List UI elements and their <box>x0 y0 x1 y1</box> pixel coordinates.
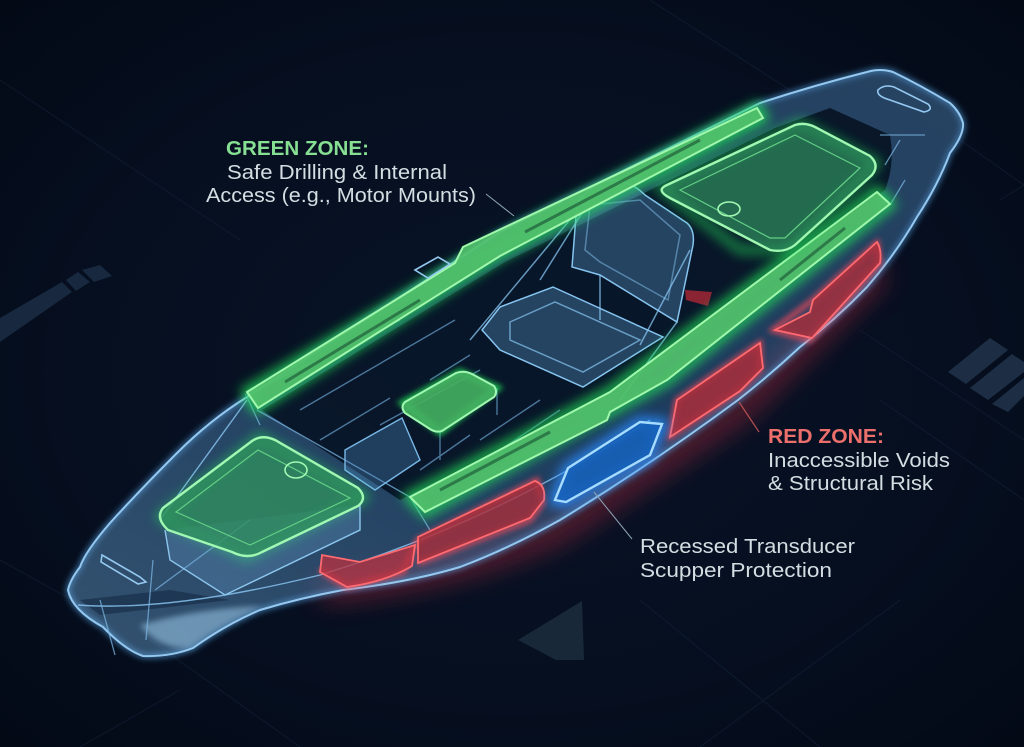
seat base <box>482 287 663 387</box>
callout: transducer <box>640 536 855 582</box>
hatch port ring <box>285 462 307 478</box>
red panel: bow small <box>320 545 415 587</box>
gunwale line <box>78 400 650 606</box>
callout: green zone: Safe Drilling & Internal <box>227 162 447 184</box>
carry handles <box>101 86 930 584</box>
green zone: top rail <box>247 108 763 408</box>
callout leader: green <box>486 194 514 216</box>
hull body <box>68 70 963 656</box>
seat <box>470 180 693 400</box>
dark bow interior <box>80 590 230 615</box>
callout leader: transducer <box>594 492 632 539</box>
hull highlight at bow <box>140 606 262 648</box>
green zone: bow hatch <box>160 437 365 595</box>
callout: green zone <box>206 138 476 207</box>
callout: transducer: Scupper Protection <box>640 560 832 582</box>
dark cockpit interior <box>262 108 892 500</box>
callout: red zone: RED ZONE: <box>768 426 884 448</box>
red panel: stern <box>775 242 881 338</box>
red panel: bow long <box>418 481 544 563</box>
green zone: centre box <box>402 372 497 432</box>
callout: red zone: & Structural Risk <box>768 473 934 495</box>
callout: transducer: Recessed Transducer <box>640 536 855 558</box>
decoration: bottom block <box>518 601 584 660</box>
callout leader: red <box>739 402 759 432</box>
decoration: right stripes <box>948 338 1024 412</box>
red interior patch <box>685 290 712 306</box>
green zone: bottom rail <box>410 192 890 512</box>
callout: red zone: Inaccessible Voids <box>768 450 950 472</box>
red panel: mid <box>670 343 763 437</box>
decoration: left stripes <box>0 265 112 342</box>
red zone panels <box>320 242 881 587</box>
green zone: stern hatch <box>660 123 877 251</box>
callout: green zone: Access (e.g., Motor Mounts) <box>206 185 476 207</box>
callout: green zone: GREEN ZONE: <box>226 138 369 160</box>
hull glow <box>68 70 963 656</box>
seat backrest <box>572 180 693 322</box>
kayak hull <box>68 70 963 656</box>
storage box <box>245 320 560 490</box>
hatch port ring <box>718 202 740 216</box>
callout: red zone <box>768 426 950 495</box>
red glow under hull <box>320 270 880 590</box>
blue transducer recess <box>555 422 662 502</box>
